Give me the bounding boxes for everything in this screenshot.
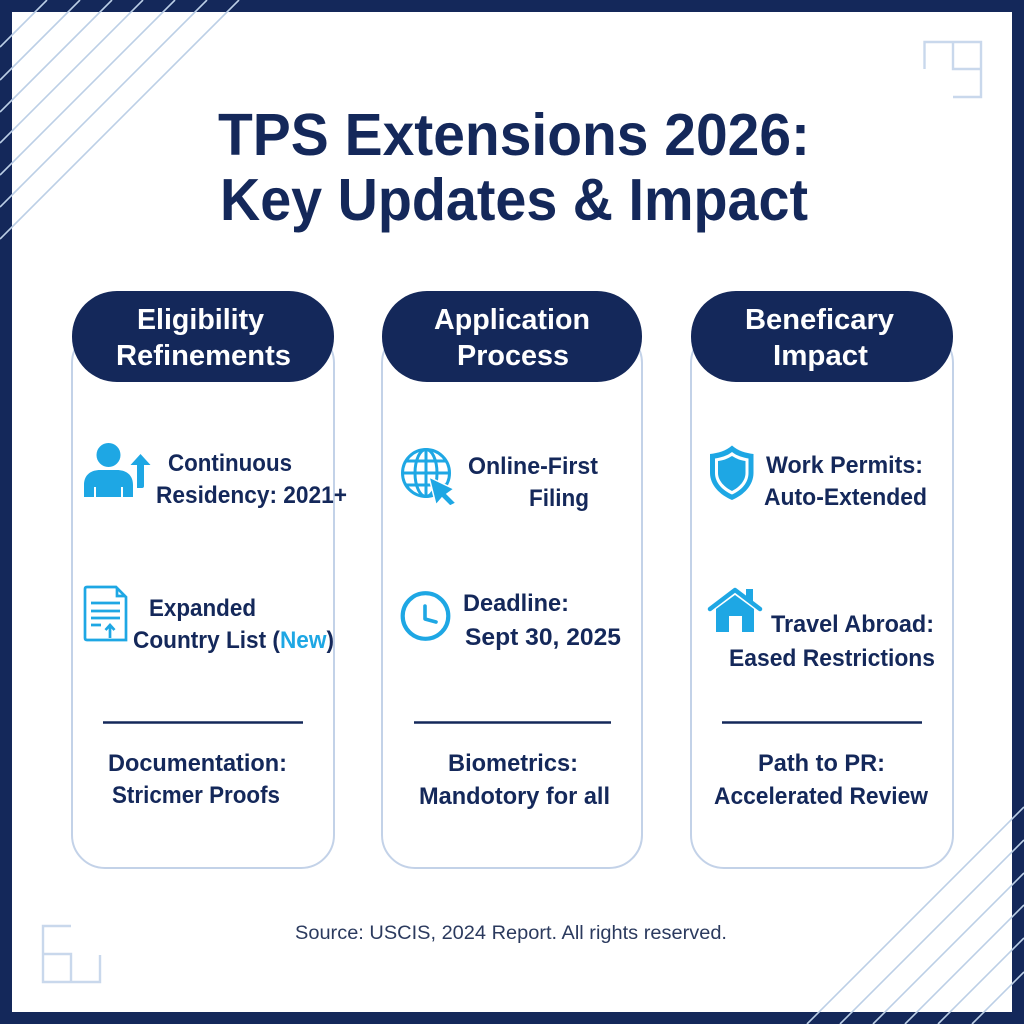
text: documentation [108, 750, 287, 809]
header: eligibility: Refinements [116, 340, 291, 372]
header: eligibility: Eligibility [137, 304, 264, 336]
icon: shield [710, 446, 754, 500]
source note: Source: USCIS, 2024 Report. All rights reserved. [295, 922, 727, 944]
header: application: Application [434, 304, 590, 336]
header: eligibility [72, 291, 334, 382]
icon: house [710, 589, 760, 632]
title: TPS Extensions 2026: [218, 102, 810, 168]
icon: person with up arrow [84, 443, 150, 497]
text: travel abroad: Travel Abroad: [771, 611, 934, 638]
text: deadline: Deadline: [463, 590, 569, 617]
text: continuous residency: Residency: 2021+ [156, 482, 347, 509]
header: beneficary [691, 291, 953, 382]
text: online-first filing: Online-First [468, 453, 598, 480]
text: work permits: Work Permits: [766, 452, 923, 479]
text: biometrics: Mandotory for all [419, 783, 610, 810]
text: documentation: Stricmer Proofs [112, 782, 280, 809]
title [218, 102, 810, 233]
icon: globe with cursor [402, 450, 456, 506]
text: travel abroad: Eased Restrictions [729, 645, 935, 672]
text: work permits: Auto-Extended [764, 484, 927, 511]
text: continuous residency [156, 450, 347, 509]
text: work permits [764, 452, 927, 511]
text: path to PR [714, 750, 928, 810]
text: expanded country list [133, 595, 334, 654]
text: path to PR: Accelerated Review [714, 783, 928, 810]
text: online-first filing [468, 453, 598, 512]
text: deadline [463, 590, 621, 651]
panel: eligibility refinements [72, 291, 347, 868]
panel: beneficiary impact [691, 291, 953, 868]
text: online-first filing: Filing [529, 485, 589, 512]
title: Key Updates & Impact [220, 167, 808, 233]
header: beneficary: Impact [773, 340, 868, 372]
header: beneficary: Beneficary [745, 304, 894, 336]
text: biometrics: Biometrics: [448, 750, 578, 777]
text: travel abroad [729, 611, 935, 672]
icon: clock [403, 593, 448, 639]
text: expanded country list: Expanded [149, 595, 256, 622]
text: path to PR: Path to PR: [758, 750, 885, 777]
text: continuous residency: Continuous [168, 450, 292, 477]
header: application [382, 291, 642, 382]
text: biometrics [419, 750, 610, 810]
text: documentation: Documentation: [108, 750, 287, 777]
text: expanded country list: Country List (New) [133, 627, 334, 654]
header: application: Process [457, 340, 569, 372]
panel: application process [382, 291, 642, 868]
text: deadline: Sept 30, 2025 [465, 624, 621, 651]
icon: document upload [85, 587, 126, 640]
